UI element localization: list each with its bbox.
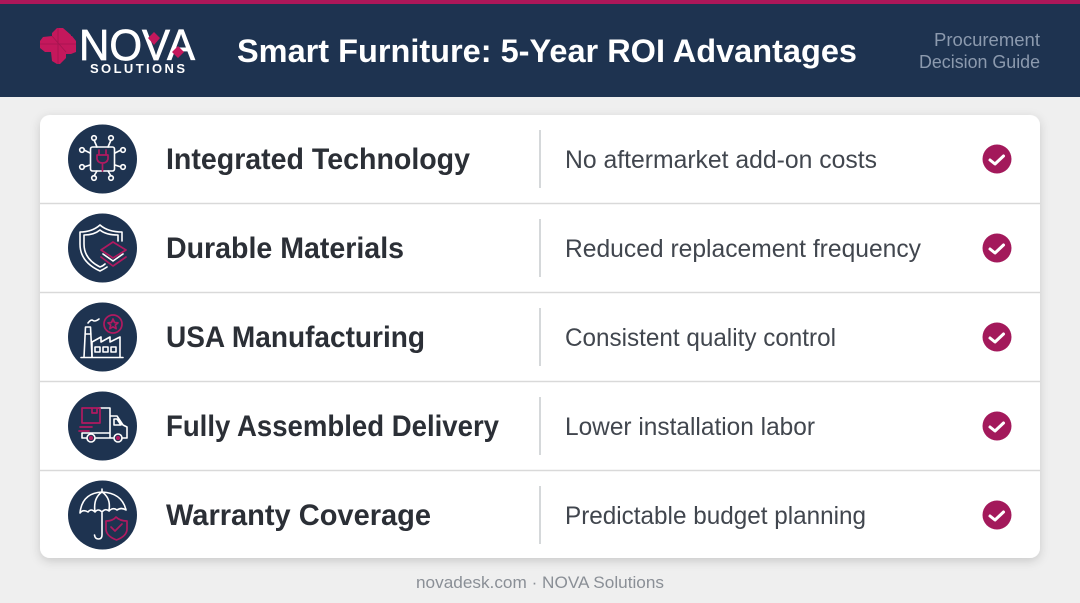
- icon: check: [982, 500, 1012, 530]
- row: Integrated Technology: [68, 124, 1012, 194]
- icon: chip with plug: [68, 124, 137, 194]
- heading: Warranty Coverage: [166, 499, 431, 532]
- icon: check: [982, 412, 1012, 440]
- footer: novadesk.com · NOVA Solutions: [416, 573, 664, 592]
- icon: factory with star: [68, 302, 137, 372]
- row: Warranty Coverage: [68, 480, 1012, 550]
- row: Fully Assembled Delivery: [68, 392, 1012, 460]
- description: Consistent quality control: [565, 324, 836, 352]
- icon: delivery truck: [68, 392, 137, 460]
- logo mark: [40, 28, 76, 64]
- description: Lower installation labor: [565, 413, 815, 441]
- header side label: Procurement: [934, 30, 1040, 50]
- icon: umbrella with shield: [68, 480, 137, 550]
- icon: check: [982, 322, 1012, 352]
- description: No aftermarket add-on costs: [565, 146, 877, 174]
- heading: Fully Assembled Delivery: [166, 410, 499, 443]
- header bar: [0, 0, 1080, 97]
- icon: shield with layers: [68, 214, 137, 282]
- header side label: Decision Guide: [919, 52, 1040, 72]
- description: Reduced replacement frequency: [565, 235, 921, 263]
- title: Smart Furniture: 5-Year ROI Advantages: [237, 33, 857, 69]
- heading: Durable Materials: [166, 232, 404, 265]
- logo subtitle: SOLUTIONS: [90, 61, 185, 76]
- heading: Integrated Technology: [166, 143, 470, 176]
- description: Predictable budget planning: [565, 502, 866, 530]
- header side label: [919, 30, 1040, 72]
- row: Durable Materials: [68, 214, 1012, 282]
- logo wordmark: NOVA: [79, 21, 196, 70]
- icon: check: [982, 144, 1012, 174]
- logo: NOVA Solutions: [40, 21, 196, 76]
- panel: advantages table: [40, 115, 1040, 558]
- logo accent diamonds: [148, 32, 184, 58]
- icon: check: [982, 234, 1012, 262]
- heading: USA Manufacturing: [166, 321, 425, 354]
- row: USA Manufacturing: [68, 302, 1012, 372]
